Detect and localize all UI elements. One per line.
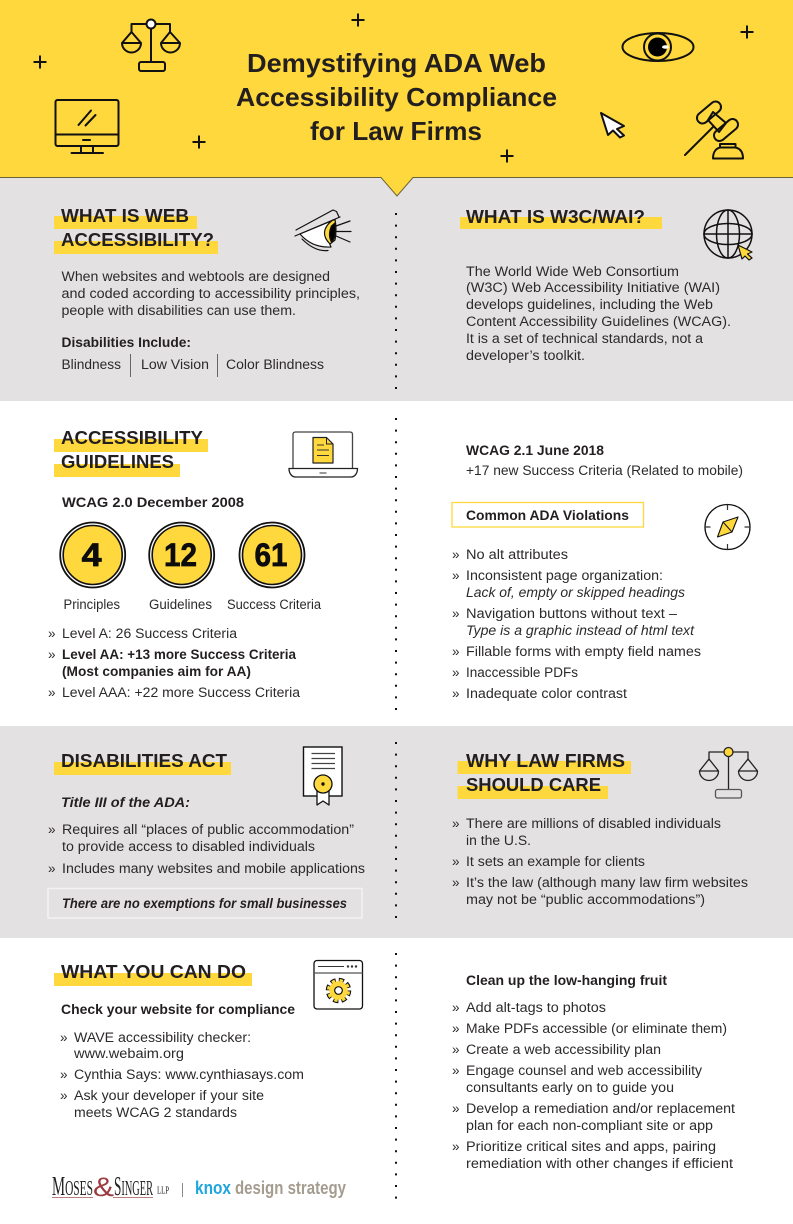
header banner [0, 0, 793, 196]
list: ADA requirements: Includes many websites and mobile applications [62, 861, 365, 876]
callout: no exemptions [48, 888, 362, 918]
list: clean-up actions: » [452, 1139, 460, 1154]
heading: disabilities act: DISABILITIES ACT [61, 750, 228, 771]
list: common violations: » [452, 568, 460, 583]
panel: accessibility guidelines [48, 427, 358, 700]
callout: common ADA violations [452, 502, 644, 527]
icon: scales [700, 748, 758, 798]
heading: what is W3C/WAI: WHAT IS W3C/WAI? [466, 206, 645, 227]
stat: 61 success criteria [227, 522, 321, 612]
list: compliance checks: » [60, 1067, 68, 1082]
list: compliance checks: WAVE accessibility checker: [74, 1030, 251, 1045]
list: common violations: » [452, 547, 460, 562]
list: compliance checks: » [60, 1088, 68, 1103]
list: clean-up actions: » [452, 1000, 460, 1015]
list: reasons to care: may not be “public accommodations”) [466, 892, 705, 907]
panel: what you can do [52, 960, 362, 1202]
stat: 4 principles [60, 522, 125, 612]
logos: Moses & Singer and Knox: LLP [157, 1184, 169, 1196]
list: compliance checks: Ask your developer if your site [74, 1088, 264, 1103]
heading: what you can do: WHAT YOU CAN DO [61, 961, 246, 982]
text: W3C description: It is a set of technical standards, not a [466, 331, 703, 346]
icon: cursor arrow [601, 113, 624, 138]
text: W3C description: The World Wide Web Consortium [466, 264, 679, 279]
icon: scales of justice [122, 20, 180, 71]
subheading: WCAG 2.0: WCAG 2.0 December 2008 [62, 495, 245, 510]
list: compliance checks: www.webaim.org [73, 1046, 184, 1061]
stat: 4 principles: Principles [64, 597, 120, 612]
list: clean-up actions: Engage counsel and web accessibility [466, 1063, 702, 1078]
heading: what is web accessibility [54, 205, 218, 254]
list: common violations: Type is a graphic instead of html text [466, 623, 695, 638]
text: accessibility definition: people with disabilities can use them. [62, 303, 296, 318]
list: conformance levels: (Most companies aim for AA) [62, 664, 251, 679]
subheading: clean up: Clean up the low-hanging fruit [466, 973, 668, 988]
list: common violations [452, 547, 701, 701]
subheading: check your website: Check your website for compliance [61, 1002, 295, 1017]
list: conformance levels: » [48, 647, 56, 662]
text: disabilities include: Disabilities Include: [62, 335, 191, 350]
panel: disabilities act [48, 747, 365, 918]
heading: why law firms should care [458, 750, 631, 799]
list: conformance levels: » [48, 685, 56, 700]
list: clean-up actions [452, 1000, 735, 1171]
list: ADA requirements: » [48, 822, 56, 837]
text: disabilities include: Low Vision [141, 357, 209, 372]
panel: what is W3C/WAI [460, 206, 752, 363]
list: conformance levels: Level A: 26 Success Criteria [62, 626, 237, 641]
title: for Law Firms [310, 116, 482, 146]
list: common violations: Inconsistent page organization: [466, 568, 663, 583]
list: clean-up actions: Prioritize critical sites and apps, pairing [466, 1139, 716, 1154]
icon: side-view eye [295, 210, 351, 251]
list: conformance levels: Level AA: +13 more Success Criteria [62, 647, 296, 662]
logos: Moses & Singer and Knox: MOSES [52, 1171, 93, 1201]
list: reasons to care: » [452, 854, 460, 869]
list: compliance checks: meets WCAG 2 standards [74, 1105, 237, 1120]
list: ADA requirements [48, 822, 365, 876]
logos: Moses & Singer and Knox [52, 1171, 346, 1202]
list: common violations: » [452, 606, 460, 621]
list: compliance checks [60, 1030, 304, 1120]
callout: common ADA violations: Common ADA Violations [466, 508, 629, 523]
text: disabilities include: Blindness [62, 357, 121, 372]
logos: Moses & Singer and Knox: & [93, 1172, 114, 1202]
text: disabilities include: Color Blindness [226, 357, 324, 372]
list: common violations: » [452, 686, 460, 701]
list: ADA requirements: Requires all “places of public accommodation” [62, 822, 354, 837]
list: common violations: Inaccessible PDFs [466, 665, 578, 680]
icon: globe with cursor [704, 210, 752, 260]
list: common violations: Navigation buttons without text – [466, 606, 678, 621]
stat: 61 success criteria: Success Criteria [227, 597, 321, 612]
text: accessibility definition: When websites and webtools are designed [62, 269, 330, 284]
list: clean-up actions: » [452, 1101, 460, 1116]
panel: why law firms should care [452, 748, 758, 907]
list: reasons to care: » [452, 816, 460, 831]
list: reasons to care: It sets an example for clients [466, 854, 645, 869]
text: accessibility definition: and coded according to accessibility principles, [62, 286, 360, 301]
text: WCAG 2.1: +17 new Success Criteria (Related to mobile) [466, 463, 743, 478]
list: compliance checks: » [60, 1030, 68, 1045]
list: conformance levels: » [48, 626, 56, 641]
list: conformance levels: Level AAA: +22 more Success Criteria [62, 685, 301, 700]
panel: low-hanging fruit [452, 973, 735, 1171]
list: common violations: No alt attributes [466, 547, 568, 562]
text: W3C description [466, 264, 731, 363]
icon: gavel [685, 99, 743, 158]
list: clean-up actions: plan for each non-compliant site or app [466, 1118, 713, 1133]
text: W3C description: develops guidelines, including the Web [466, 297, 713, 312]
icon: laptop with document [289, 432, 358, 477]
text: WCAG 2.1 [466, 443, 743, 478]
list: reasons to care: It’s the law (although many law firm websites [466, 875, 748, 890]
icon: browser with gear [314, 960, 362, 1009]
logos: Moses & Singer and Knox: design strategy [235, 1178, 346, 1198]
text: accessibility definition [62, 269, 360, 318]
list: reasons to care: » [452, 875, 460, 890]
text: W3C description: (W3C) Web Accessibility Initiative (WAI) [466, 280, 720, 295]
title [236, 48, 557, 146]
list: common violations: Lack of, empty or skipped headings [466, 585, 685, 600]
list: compliance checks: Cynthia Says: www.cynthiasays.com [74, 1067, 304, 1082]
icon: eye [622, 33, 694, 61]
list: common violations: Fillable forms with empty field names [466, 644, 701, 659]
heading: why law firms should care: SHOULD CARE [466, 774, 601, 795]
heading: what is web accessibility: ACCESSIBILITY? [61, 229, 214, 250]
heading: accessibility guidelines: GUIDELINES [61, 451, 174, 472]
list: ADA requirements: » [48, 861, 56, 876]
list: clean-up actions: Create a web accessibility plan [466, 1042, 661, 1057]
list: ADA requirements: to provide access to disabled individuals [62, 839, 315, 854]
list: reasons to care: in the U.S. [466, 833, 531, 848]
icon: plus signs [34, 14, 754, 162]
panel: WCAG 2.1 and common violations [452, 443, 750, 701]
list: reasons to care [452, 816, 748, 907]
icon: compass [705, 504, 750, 550]
stat: 12 guidelines: Guidelines [149, 597, 212, 612]
list: clean-up actions: » [452, 1042, 460, 1057]
heading: what is web accessibility: WHAT IS WEB [61, 205, 189, 226]
list: common violations: » [452, 665, 460, 680]
callout: no exemptions: There are no exemptions for small businesses [62, 896, 347, 911]
heading: accessibility guidelines: ACCESSIBILITY [61, 427, 204, 448]
heading: why law firms should care: WHY LAW FIRMS [466, 750, 625, 771]
title: Accessibility Compliance [236, 82, 557, 112]
stat: 12 guidelines [149, 522, 214, 612]
icon: monitor [56, 100, 118, 153]
stat: 4 principles: 4 [82, 537, 102, 573]
text: disabilities include [62, 335, 324, 377]
logos: Moses & Singer and Knox: SINGER [114, 1171, 153, 1201]
list: clean-up actions: Make PDFs accessible (or eliminate them) [466, 1021, 727, 1036]
list: clean-up actions: » [452, 1063, 460, 1078]
list: conformance levels [48, 626, 301, 700]
list: common violations: » [452, 644, 460, 659]
icon: certificate [304, 747, 342, 805]
list: clean-up actions: consultants early on to guide you [466, 1080, 674, 1095]
list: reasons to care: There are millions of disabled individuals [466, 816, 721, 831]
list: clean-up actions: Add alt-tags to photos [466, 1000, 606, 1015]
list: common violations: Inadequate color contrast [466, 686, 627, 701]
panel: what is web accessibility [54, 205, 360, 377]
heading: accessibility guidelines [54, 427, 208, 477]
stat: 61 success criteria: 61 [254, 537, 288, 573]
subheading: Title III: Title III of the ADA: [61, 795, 190, 810]
list: clean-up actions: » [452, 1021, 460, 1036]
list: clean-up actions: Develop a remediation and/or replacement [466, 1101, 735, 1116]
title: Demystifying ADA Web [247, 48, 546, 78]
text: W3C description: developer’s toolkit. [466, 348, 585, 363]
text: W3C description: Content Accessibility Guidelines (WCAG). [466, 314, 731, 329]
stat: 12 guidelines: 12 [164, 537, 197, 573]
text: WCAG 2.1: WCAG 2.1 June 2018 [466, 443, 604, 458]
list: clean-up actions: remediation with other changes if efficient [466, 1156, 733, 1171]
logos: Moses & Singer and Knox: knox [195, 1178, 231, 1198]
